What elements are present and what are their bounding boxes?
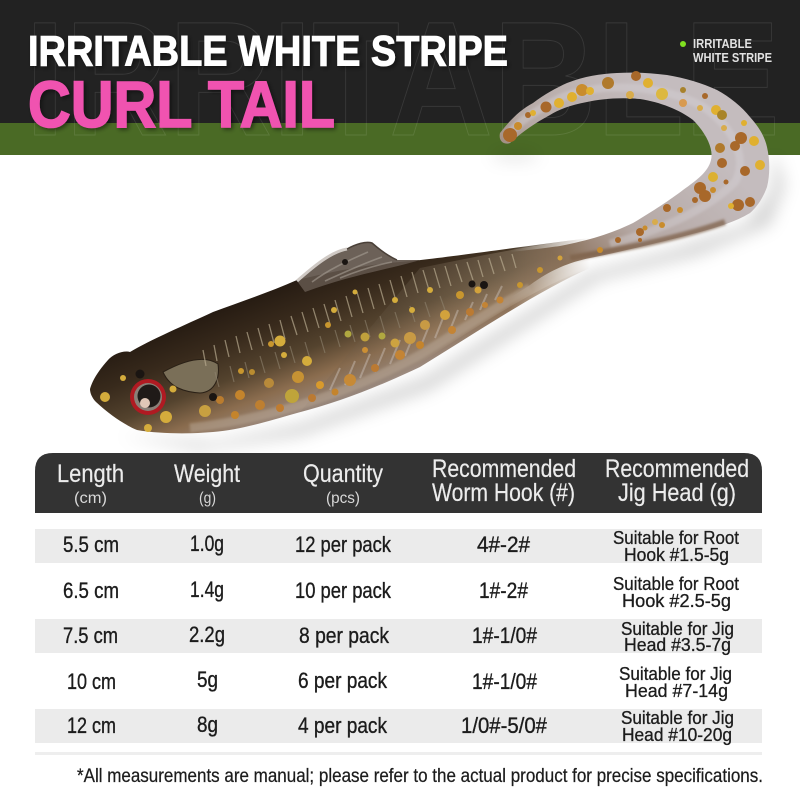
spec table (35, 453, 762, 755)
table header (35, 453, 762, 513)
row 10 cm: 6 per pack (298, 668, 388, 693)
dorsal fin (297, 242, 420, 292)
title: CURL TAIL (28, 67, 335, 141)
table header: Recommended (605, 455, 749, 483)
row 10 cm: 1#-1/0# (472, 669, 538, 694)
belly highlight (190, 288, 530, 428)
row 12 cm: 1/0#-5/0# (461, 713, 548, 738)
row 6.5 cm: 6.5 cm (63, 578, 119, 603)
table header: Worm Hook (#) (432, 479, 575, 507)
table header: Jig Head (g) (618, 479, 736, 507)
tail flecks (503, 71, 765, 253)
row 10 cm: 5g (197, 667, 218, 692)
row 5.5 cm: 12 per pack (295, 532, 392, 557)
row 12 cm: 4 per pack (298, 713, 388, 738)
row 6.5 cm: 1.4g (190, 577, 224, 602)
row 6.5 cm: Suitable for Root (613, 573, 739, 594)
row 7.5 cm: 7.5 cm (63, 623, 118, 648)
row 5.5 cm (63, 527, 739, 565)
body flecks (100, 256, 562, 432)
row 7.5 cm: Suitable for Jig (621, 618, 734, 639)
legend label: WHITE STRIPE (693, 51, 772, 65)
row 10 cm (67, 663, 732, 701)
eye (130, 379, 166, 415)
scales (203, 254, 516, 366)
row 10 cm: 10 cm (67, 669, 116, 694)
fish lure (90, 71, 785, 450)
table header: (cm) (74, 490, 107, 507)
row 12 cm: Head #10-20g (622, 724, 732, 745)
row 7.5 cm: Head #3.5-7g (624, 634, 731, 655)
table header: Recommended (432, 455, 576, 483)
row 7.5 cm: 8 per pack (299, 623, 390, 648)
belly streaks (330, 286, 502, 390)
table header: Length (57, 460, 124, 488)
row 12 cm (67, 707, 734, 745)
row 6.5 cm: Hook #2.5-5g (622, 590, 731, 611)
row 5.5 cm: 5.5 cm (63, 532, 119, 557)
curl tail (500, 73, 769, 305)
gill plate (163, 359, 218, 393)
table header: Quantity (303, 460, 383, 488)
row 12 cm: 12 cm (67, 713, 116, 738)
row 12 cm: 8g (197, 712, 218, 737)
title (28, 28, 508, 141)
row 7.5 cm: 2.2g (189, 622, 225, 647)
legend label (680, 37, 772, 65)
row 5.5 cm: Hook #1.5-5g (624, 544, 729, 565)
row 7.5 cm: 1#-1/0# (472, 623, 538, 648)
row stripes (35, 529, 762, 755)
row 10 cm: Suitable for Jig (619, 663, 732, 684)
row 7.5 cm (63, 618, 734, 655)
dark spots (136, 259, 488, 401)
table header: (g) (199, 490, 216, 507)
row 10 cm: Head #7-14g (625, 680, 728, 701)
body (90, 238, 590, 433)
row 6.5 cm: 10 per pack (295, 578, 392, 603)
table header: Weight (174, 460, 240, 488)
row 6.5 cm (63, 573, 739, 611)
row 12 cm: Suitable for Jig (621, 707, 734, 728)
shadow (120, 150, 785, 450)
legend label: IRRITABLE (693, 37, 752, 51)
row 5.5 cm: Suitable for Root (613, 527, 739, 548)
header band (0, 0, 800, 155)
title: IRRITABLE WHITE STRIPE (28, 28, 508, 76)
row 6.5 cm: 1#-2# (479, 578, 529, 603)
row 5.5 cm: 1.0g (190, 531, 224, 556)
table header: (pcs) (326, 490, 360, 507)
row 5.5 cm: 4#-2# (477, 532, 531, 557)
